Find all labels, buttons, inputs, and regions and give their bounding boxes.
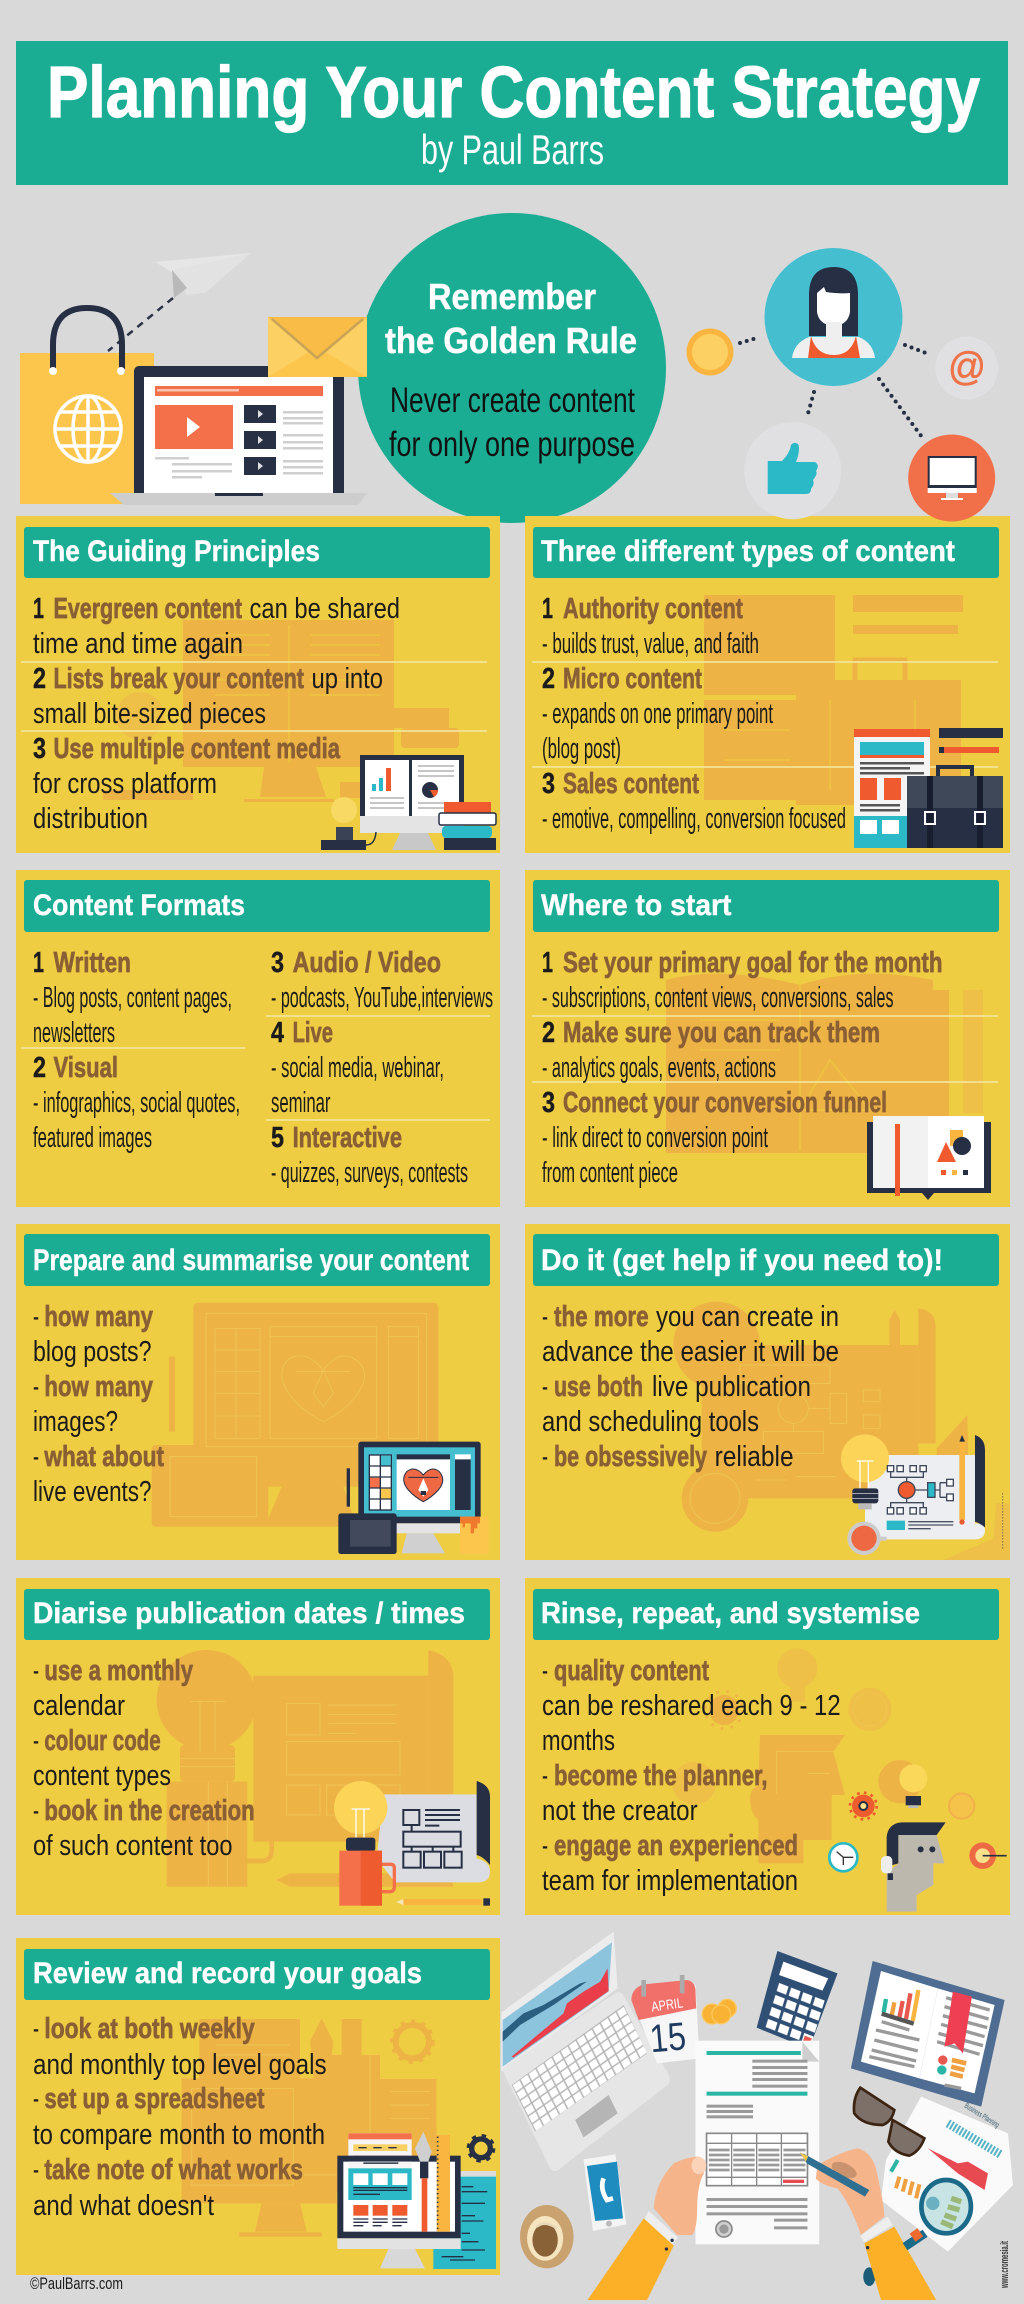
text column: audio, live and interactive: seminar (271, 1087, 331, 1119)
icon: open notebook (867, 1116, 991, 1200)
text block: 3 (542, 1087, 555, 1119)
text block: Sales content (563, 768, 699, 800)
text block: of such content too (33, 1830, 232, 1862)
icon: thumbs up (744, 422, 841, 519)
text block: - expands on one primary point (542, 698, 773, 730)
text block: Lists break your content (54, 663, 304, 695)
icon: design monitor and tablet (338, 1442, 488, 1554)
text block: from content piece (542, 1157, 678, 1189)
text column: audio, live and interactive: - quizzes, surveys, contests (271, 1157, 468, 1189)
text block: - (33, 2083, 39, 2115)
dotted connectors (740, 337, 931, 437)
text block (542, 593, 846, 835)
heading (533, 527, 999, 578)
heading: Where to start (541, 889, 732, 922)
coins (702, 1999, 736, 2024)
heading: Diarise publication dates / times (33, 1597, 465, 1630)
text block: look at both weekly (44, 2013, 255, 2045)
laptop (501, 1932, 670, 2171)
magnifier (905, 2180, 971, 2247)
text block: 2 (33, 663, 46, 695)
text block: can be shared (250, 593, 400, 625)
watermark: head, gears and coins (672, 1648, 922, 1863)
text column: written and visual (33, 947, 240, 1154)
text block: content types (33, 1760, 171, 1792)
text block: you can create in (656, 1301, 839, 1333)
icon: envelope (268, 317, 367, 377)
text block: live events? (33, 1476, 152, 1508)
text block: - (542, 1830, 548, 1862)
heading (24, 1589, 490, 1640)
text column: audio, live and interactive: 3 (271, 947, 284, 979)
text block: quality content (554, 1655, 709, 1687)
title banner (16, 41, 1008, 185)
watermark: monitor and tools (182, 2018, 437, 2237)
text block: and scheduling tools (542, 1406, 759, 1438)
text block (33, 1301, 164, 1508)
text column: audio, live and interactive: - podcasts, YouTube,interviews (271, 982, 493, 1014)
text block: blog posts? (33, 1336, 152, 1368)
text block: - (542, 1371, 548, 1403)
text block: 1 (33, 593, 44, 625)
illustration: desk with laptop, calendar, report and hands (501, 1932, 1013, 2300)
golden rule circle: Remember (428, 276, 596, 317)
byline: by Paul Barrs (421, 126, 604, 173)
text block: live publication (652, 1371, 811, 1403)
heading (24, 1234, 490, 1286)
phone (584, 2154, 626, 2231)
charts paper (881, 2097, 1013, 2252)
text block: take note of what works (44, 2154, 303, 2186)
icon: laptop with video page (110, 366, 367, 505)
icon: shopping bag with globe (20, 308, 154, 504)
text column: written and visual: 1 (33, 947, 44, 979)
text block: use a monthly (44, 1655, 193, 1687)
icon: desktop, books and lamp (321, 755, 496, 850)
text block: Authority content (563, 593, 743, 625)
right hand, pen and sleeve (800, 2148, 936, 2300)
text block: set up a spreadsheet (44, 2083, 265, 2115)
panel: where to start (525, 870, 1010, 1207)
golden rule circle (358, 213, 666, 523)
text block: distribution (33, 803, 148, 835)
text block: - (542, 1655, 548, 1687)
text column: audio, live and interactive: 4 (271, 1017, 284, 1049)
text column: written and visual: - Blog posts, content pages, (33, 982, 232, 1014)
panel: three different types of content (525, 516, 1010, 853)
heading: Review and record your goals (33, 1957, 422, 1990)
open report book (851, 1961, 1005, 2107)
text block: - link direct to conversion point (542, 1122, 768, 1154)
text block: team for implementation (542, 1865, 798, 1897)
heading: Do it (get help if you need to)! (541, 1244, 943, 1277)
icon: paper plane with dashed trail (108, 253, 251, 351)
text block: Micro content (563, 663, 702, 695)
icon: web design monitor (337, 2132, 496, 2269)
text column: written and visual: featured images (33, 1122, 152, 1154)
heading: Prepare and summarise your content (33, 1244, 469, 1277)
text block: Make sure you can track them (563, 1017, 880, 1049)
heading: Content Formats (33, 889, 245, 922)
text block: 2 (542, 663, 555, 695)
text block: - builds trust, value, and faith (542, 628, 759, 660)
heading (24, 1949, 490, 2000)
watermark: bulb, plan and mug (157, 1650, 453, 1887)
credit: cromesia: www.cromesia.it (999, 2241, 1011, 2289)
text block: to compare month to month (33, 2119, 325, 2151)
panel: the guiding principles (16, 516, 500, 853)
golden rule circle: for only one purpose (389, 425, 635, 464)
text block: - (33, 2154, 39, 2186)
text block: (blog post) (542, 733, 621, 765)
text column: audio, live and interactive: Live (293, 1017, 333, 1049)
text block: and what doesn't (33, 2190, 214, 2222)
left hand and sleeve (588, 2157, 706, 2300)
text block: can be reshared each 9 - 12 (542, 1690, 841, 1722)
icon: sheet, ruler and briefcase (854, 728, 1003, 848)
text block: - (33, 1441, 39, 1473)
text block: - (33, 1301, 39, 1333)
heading (533, 880, 999, 932)
icon: bulb, mug and plan (334, 1781, 490, 1906)
text block: be obsessively (554, 1441, 707, 1473)
watermark: monitor and tablet (152, 1303, 438, 1527)
text block: become the planner, (554, 1760, 768, 1792)
text block: 2 (542, 1017, 555, 1049)
text block: advance the easier it will be (542, 1336, 839, 1368)
text block: Connect your conversion funnel (563, 1087, 887, 1119)
text column: written and visual: 2 (33, 1052, 46, 1084)
icon: light bulb and flowchart (841, 1434, 1003, 1555)
text block: - (33, 1371, 39, 1403)
icon: at sign: @ (948, 345, 986, 389)
text block: colour code (44, 1725, 161, 1757)
text block: how many (44, 1371, 153, 1403)
calendar: APRIL (650, 1994, 684, 2015)
heading: The Guiding Principles (33, 535, 320, 568)
text column: audio, live and interactive (271, 947, 493, 1189)
calculator (757, 1951, 838, 2049)
heading (24, 880, 490, 932)
text block: - (33, 1725, 39, 1757)
panel: review and record your goals (16, 1938, 500, 2275)
icon: at sign (935, 336, 998, 400)
heading (24, 527, 490, 578)
text block: calendar (33, 1690, 125, 1722)
text block (33, 2013, 327, 2222)
text block: 3 (542, 768, 555, 800)
text block: time and time again (33, 628, 243, 660)
text block: 1 (542, 947, 553, 979)
panel: do it (525, 1224, 1010, 1560)
credit: copyright: ©PaulBarrs.com (30, 2274, 123, 2293)
text block (542, 1301, 839, 1473)
text block: Evergreen content (54, 593, 242, 625)
text block (542, 1655, 841, 1897)
golden rule circle: the Golden Rule (385, 320, 637, 361)
heading: Rinse, repeat, and systemise (541, 1597, 920, 1630)
text block (33, 593, 400, 835)
text block: book in the creation (44, 1795, 255, 1827)
text block: - (33, 2013, 39, 2045)
glasses (854, 2088, 924, 2156)
text column: audio, live and interactive: - social media, webinar, (271, 1052, 444, 1084)
text block: Use multiple content media (54, 733, 341, 765)
text column: audio, live and interactive: 5 (271, 1122, 284, 1154)
text block (542, 947, 942, 1189)
text block: 3 (33, 733, 46, 765)
text block: - analytics goals, events, actions (542, 1052, 776, 1084)
text block: the more (554, 1301, 649, 1333)
text column: audio, live and interactive: Interactive (293, 1122, 402, 1154)
icon: monitor circle (908, 434, 995, 522)
text column: written and visual: Written (54, 947, 131, 979)
text block: up into (312, 663, 383, 695)
text column: written and visual: Visual (54, 1052, 118, 1084)
text block: - (33, 1795, 39, 1827)
text block: small bite-sized pieces (33, 698, 266, 730)
panel: diarise publication dates (16, 1578, 500, 1915)
text block: - (542, 1441, 548, 1473)
text block (33, 1655, 255, 1862)
icon: thinking head with gear, clock and coin (829, 1764, 1007, 1912)
document (696, 2041, 819, 2244)
text block: - (33, 1655, 39, 1687)
text column: audio, live and interactive: Audio / Video (293, 947, 441, 979)
heading (533, 1589, 999, 1640)
heading (533, 1234, 999, 1286)
text block: for cross platform (33, 768, 217, 800)
text block: how many (44, 1301, 153, 1333)
text block: 1 (542, 593, 553, 625)
text block: and monthly top level goals (33, 2049, 327, 2081)
coffee cup (520, 2205, 574, 2268)
watermark: monitor, books and lamp (103, 620, 459, 802)
text block: what about (44, 1441, 164, 1473)
watermark: notebook and ruler (666, 974, 983, 1155)
text block: months (542, 1725, 615, 1757)
panel: rinse, repeat, and systemise (525, 1578, 1010, 1915)
text block: reliable (715, 1441, 794, 1473)
calendar (631, 1975, 700, 2063)
text block: not the creator (542, 1795, 698, 1827)
text block: - (542, 1301, 548, 1333)
heading: Three different types of content (541, 535, 955, 568)
text column: written and visual: - infographics, social quotes, (33, 1087, 240, 1119)
text block: images? (33, 1406, 118, 1438)
text column: written and visual: newsletters (33, 1017, 115, 1049)
calendar: 15 (648, 2014, 688, 2061)
icon: gold coin (686, 328, 734, 376)
text block: use both (554, 1371, 643, 1403)
watermark: bulb, plan and magnifier (673, 1302, 1010, 1560)
charts paper: Business Planning (963, 2101, 1001, 2130)
watermark: sheet and briefcase (704, 595, 963, 805)
panel: prepare and summarise (16, 1224, 500, 1560)
icon: woman avatar (764, 248, 902, 386)
text block: - (542, 1760, 548, 1792)
golden rule circle: Never create content (390, 381, 635, 420)
text block: engage an experienced (554, 1830, 798, 1862)
panel: content formats (16, 870, 500, 1207)
